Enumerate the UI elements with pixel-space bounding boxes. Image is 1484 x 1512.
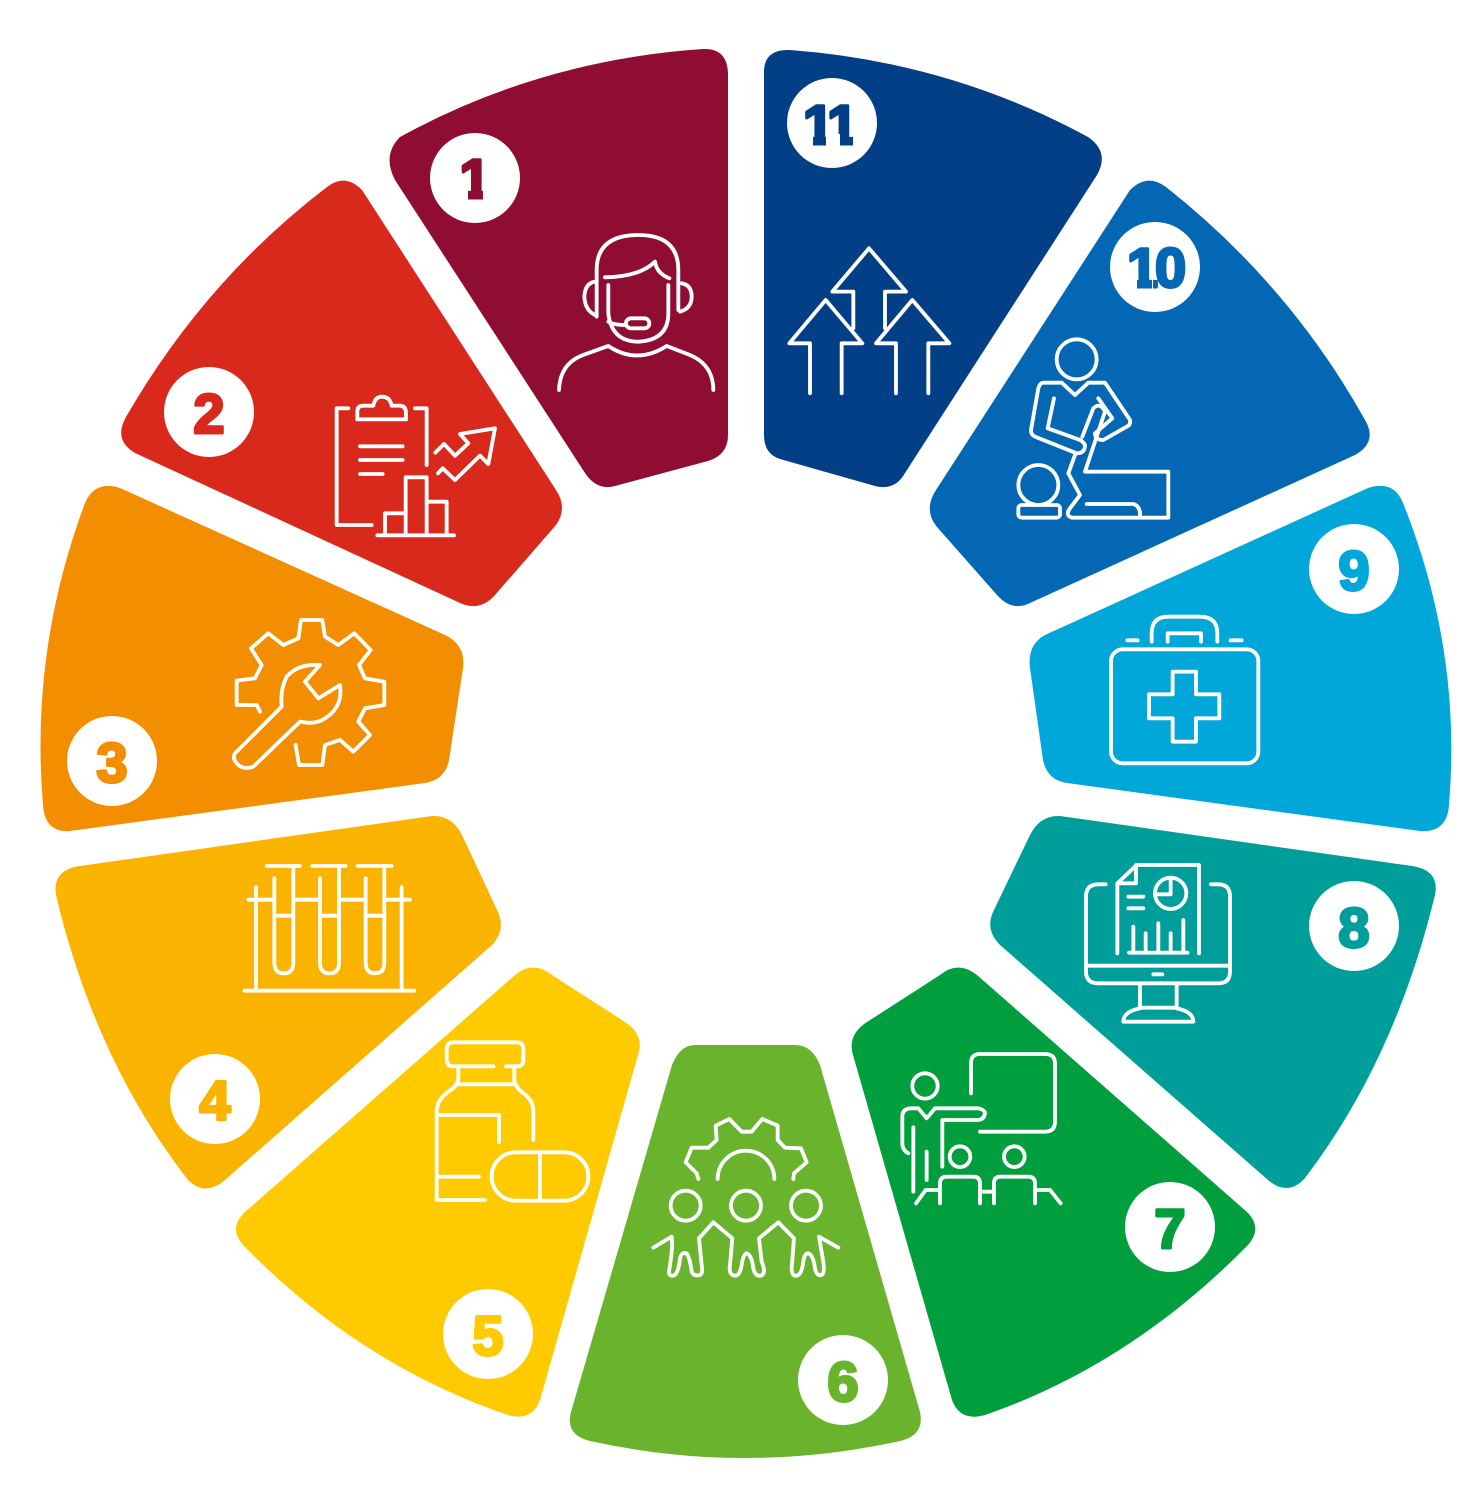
segment 9: first aid <box>1030 486 1451 831</box>
segment 9: first aid: 9 <box>1338 539 1370 602</box>
segment 8: data analysis: 8 <box>1338 896 1370 959</box>
segment 3: maintenance: 3 <box>96 731 128 794</box>
segment 7: training: 7 <box>1154 1197 1186 1260</box>
segment 1: customer support: 1 <box>459 147 491 210</box>
segment 8: data analysis <box>990 816 1436 1188</box>
segment 5: medicine <box>236 968 640 1417</box>
segment 5: medicine: 5 <box>472 1304 504 1367</box>
segment 2: report and growth <box>121 181 562 606</box>
segment 10: patient care <box>930 181 1370 606</box>
segment 7: training <box>852 968 1255 1417</box>
segment 2: report and growth: 2 <box>193 382 225 445</box>
segment 10: patient care: 10 <box>1127 236 1184 299</box>
segment 11: growth arrows <box>764 50 1102 487</box>
segment 3: maintenance <box>41 486 463 831</box>
segment 1: customer support <box>390 49 728 487</box>
segment 4: laboratory tubes <box>56 816 501 1188</box>
segment 6: team and gear: 6 <box>827 1350 859 1413</box>
segment 6: team and gear <box>570 1045 921 1458</box>
segment 11: growth arrows: 11 <box>803 93 857 156</box>
segment 4: laboratory tubes: 4 <box>199 1069 231 1132</box>
